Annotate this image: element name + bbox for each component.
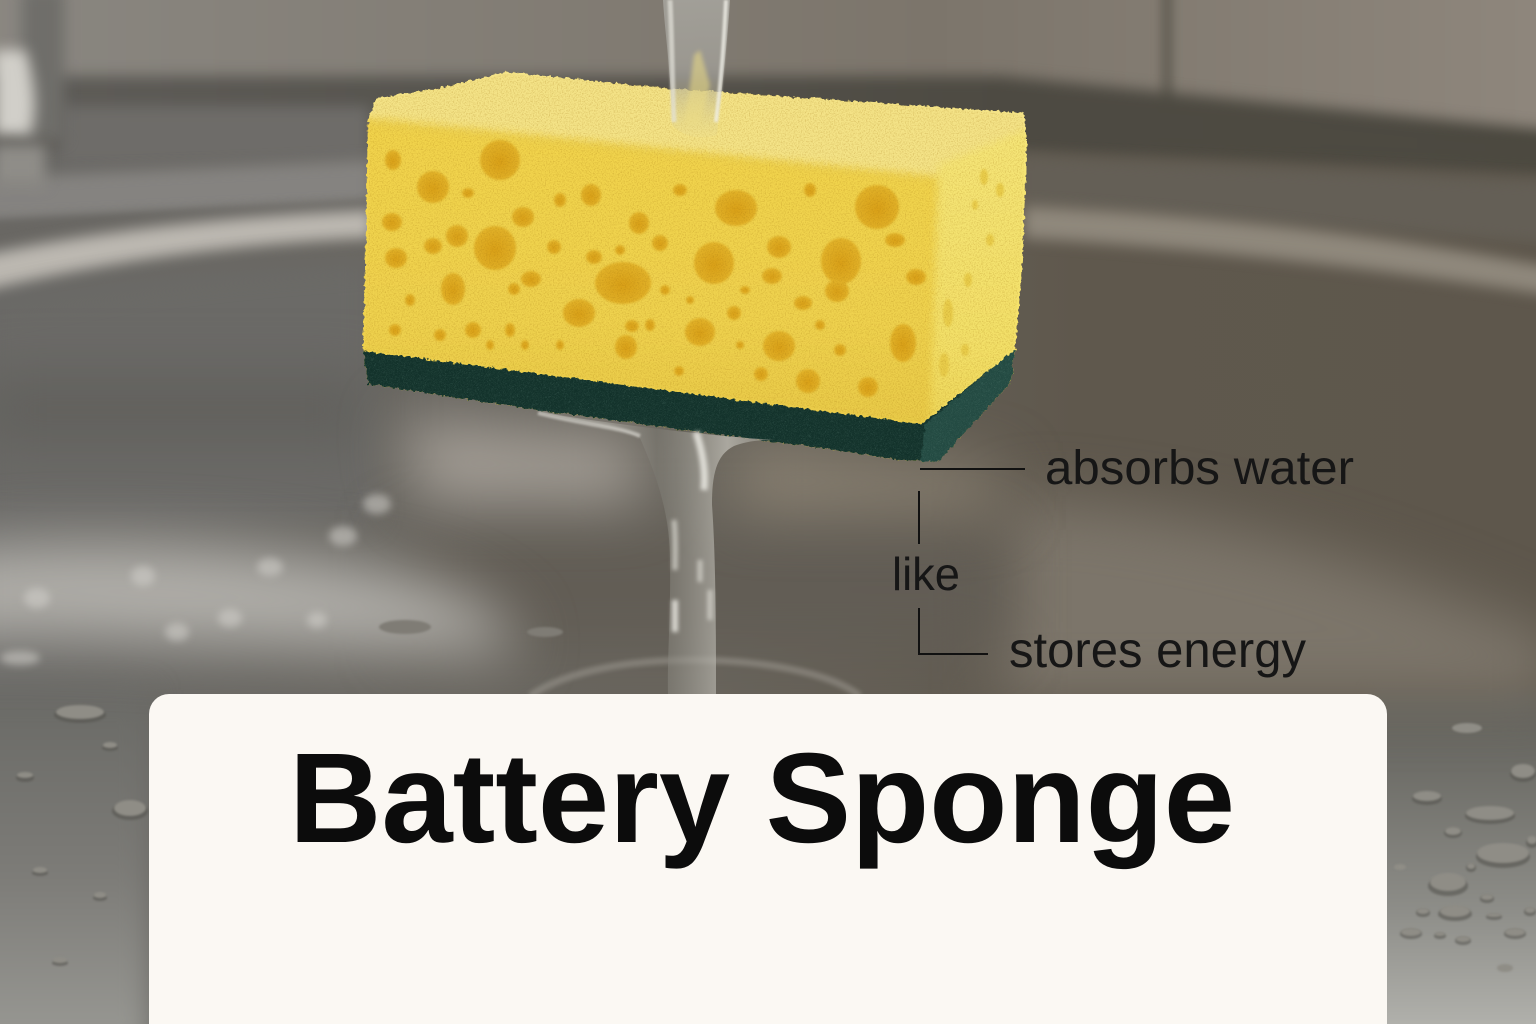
- sponge body with rough edges: [362, 70, 1028, 462]
- left basin: [0, 260, 372, 520]
- sponge side face: [930, 128, 1028, 416]
- back wall tiles: [0, 0, 1536, 140]
- lower left floor: [0, 690, 150, 1024]
- lower right floor: [1370, 690, 1536, 1024]
- green scouring layer: [362, 350, 1016, 462]
- lower wall band: [60, 106, 370, 165]
- title: Battery Sponge: [289, 727, 1235, 870]
- faucet: [22, 0, 64, 140]
- sponge front face: [362, 126, 368, 374]
- dark strip below the wall: [0, 76, 1536, 175]
- blurred droplets on the left: [0, 494, 391, 665]
- label: like: like: [892, 548, 960, 600]
- right rim highlight: [1024, 206, 1536, 296]
- title card: [149, 694, 1387, 1024]
- glow under the sponge: [400, 420, 640, 500]
- centre dark zone: [400, 530, 1000, 650]
- label connector lines: [919, 469, 1025, 654]
- label: stores energy: stores energy: [1009, 622, 1306, 678]
- water stream below the sponge: [538, 412, 775, 694]
- side face pores: [939, 169, 1004, 377]
- left counter: [0, 160, 372, 222]
- sponge pores: [382, 140, 926, 397]
- bright left band: [0, 542, 520, 651]
- ripple at the stream base: [530, 660, 860, 696]
- label: absorbs water: absorbs water: [1045, 442, 1354, 495]
- droplet shadows: [16, 707, 1536, 966]
- sponge: [362, 70, 1028, 462]
- sponge base: [362, 70, 1028, 462]
- left rim highlight: [0, 210, 372, 292]
- water stream above the sponge: [663, 0, 730, 138]
- sponge top face: [367, 70, 1028, 180]
- sponge texture: [365, 74, 1025, 422]
- water droplets on the sink: [17, 620, 1536, 972]
